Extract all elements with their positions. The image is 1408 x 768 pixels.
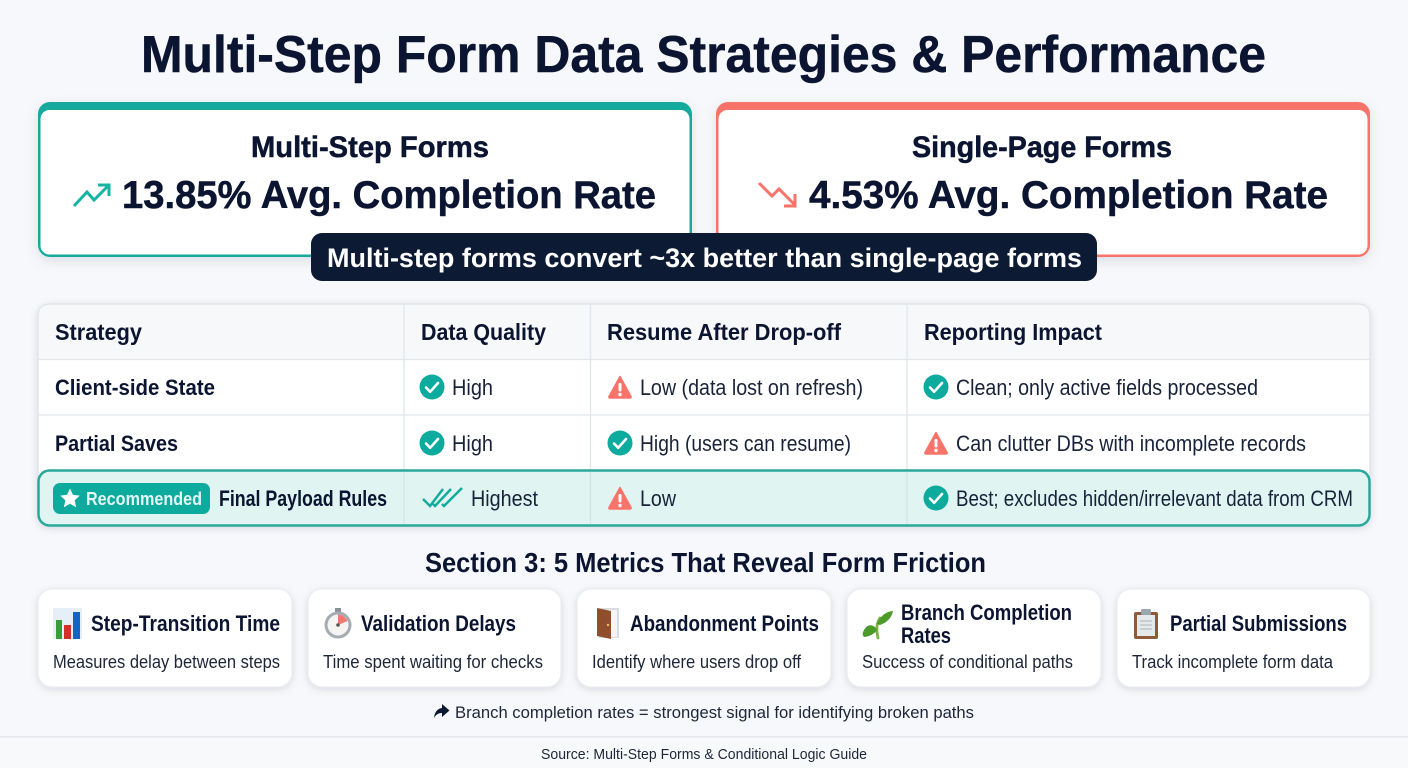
table header row (55, 319, 1102, 345)
metric card: validation delays: Validation Delays (361, 611, 516, 636)
panel: multi-step forms (38, 102, 692, 257)
metric card: abandonment points: Abandonment Points (630, 611, 819, 636)
table row: client-side state: Clean; only active fields processed (956, 375, 1258, 400)
metric card: partial submissions: Partial Submissions (1170, 611, 1347, 636)
metric card: branch completion rates: Rates (901, 623, 951, 648)
callout: 3x conversion (311, 233, 1097, 281)
icon: clipboard (1134, 609, 1158, 639)
metric card: validation delays (308, 589, 561, 687)
table header row: Reporting Impact (924, 319, 1102, 345)
metric card: step-transition time: Measures delay between steps (53, 652, 280, 672)
heading: single-page forms: Single-Page Forms (912, 131, 1172, 164)
icon: stopwatch (324, 608, 352, 638)
stat: multi-step completion rate: 13.85% Avg. Completion Rate (122, 174, 656, 217)
badge: recommended (53, 483, 210, 514)
table row: partial saves: Partial Saves (55, 431, 178, 456)
badge: recommended: Recommended (86, 489, 202, 509)
icon: trending up arrow (74, 185, 109, 206)
note: strongest signal: Branch completion rates = strongest signal for identifying broken paths (455, 703, 974, 722)
title: Multi-Step Form Data Strategies & Performance (141, 26, 1266, 84)
metric card: validation delays: Time spent waiting for checks (323, 652, 543, 672)
metric card: partial submissions: Track incomplete form data (1132, 652, 1334, 672)
panel: single-page forms (716, 102, 1370, 257)
table row: client-side state: High (452, 375, 493, 400)
icon: seedling (863, 611, 893, 638)
table row: client-side state: Client-side State (55, 375, 215, 400)
metric card: partial submissions (1117, 589, 1370, 687)
metric card: abandonment points (577, 589, 831, 687)
table row: final payload rules (recommended) (38, 470, 1370, 526)
icon: triple check (423, 488, 462, 506)
icon: bar chart (53, 608, 82, 639)
table row: partial saves: High (452, 431, 493, 456)
footer: source: Source: Multi-Step Forms & Conditional Logic Guide (541, 746, 867, 763)
table row: final payload rules (recommended): Highest (471, 486, 538, 511)
metric card: step-transition time (38, 589, 292, 687)
table row: client-side state (55, 374, 1258, 400)
metric card: abandonment points: Identify where users drop off (592, 652, 802, 672)
callout: 3x conversion: Multi-step forms convert ~3x better than single-page forms (327, 243, 1082, 273)
heading: section 3: Section 3: 5 Metrics That Reveal Form Friction (425, 547, 986, 578)
metric card: branch completion rates: Branch Completion (901, 600, 1072, 625)
panel: strategy table (38, 304, 1370, 526)
table row: partial saves (55, 430, 1306, 456)
footer: source (0, 736, 1408, 768)
icon: door (597, 608, 619, 639)
metric card: step-transition time: Step-Transition Time (91, 611, 280, 636)
table header row: Data Quality (421, 319, 546, 345)
stat: single-page completion rate: 4.53% Avg. Completion Rate (809, 174, 1328, 217)
table row: partial saves: High (users can resume) (640, 431, 851, 456)
metric card: branch completion rates: Success of conditional paths (862, 652, 1073, 672)
icon: forward arrow (434, 704, 450, 718)
heading: multi-step forms: Multi-Step Forms (251, 131, 489, 164)
table header row: Strategy (55, 319, 142, 345)
table row: partial saves: Can clutter DBs with incomplete records (956, 431, 1306, 456)
icon: trending down arrow (759, 183, 795, 206)
table header row: Resume After Drop-off (607, 319, 841, 345)
table row: final payload rules (recommended): Final Payload Rules (219, 486, 387, 511)
table row: client-side state: Low (data lost on refresh) (640, 375, 863, 400)
table row: final payload rules (recommended): Low (640, 486, 676, 511)
metric card: branch completion rates (847, 589, 1101, 687)
